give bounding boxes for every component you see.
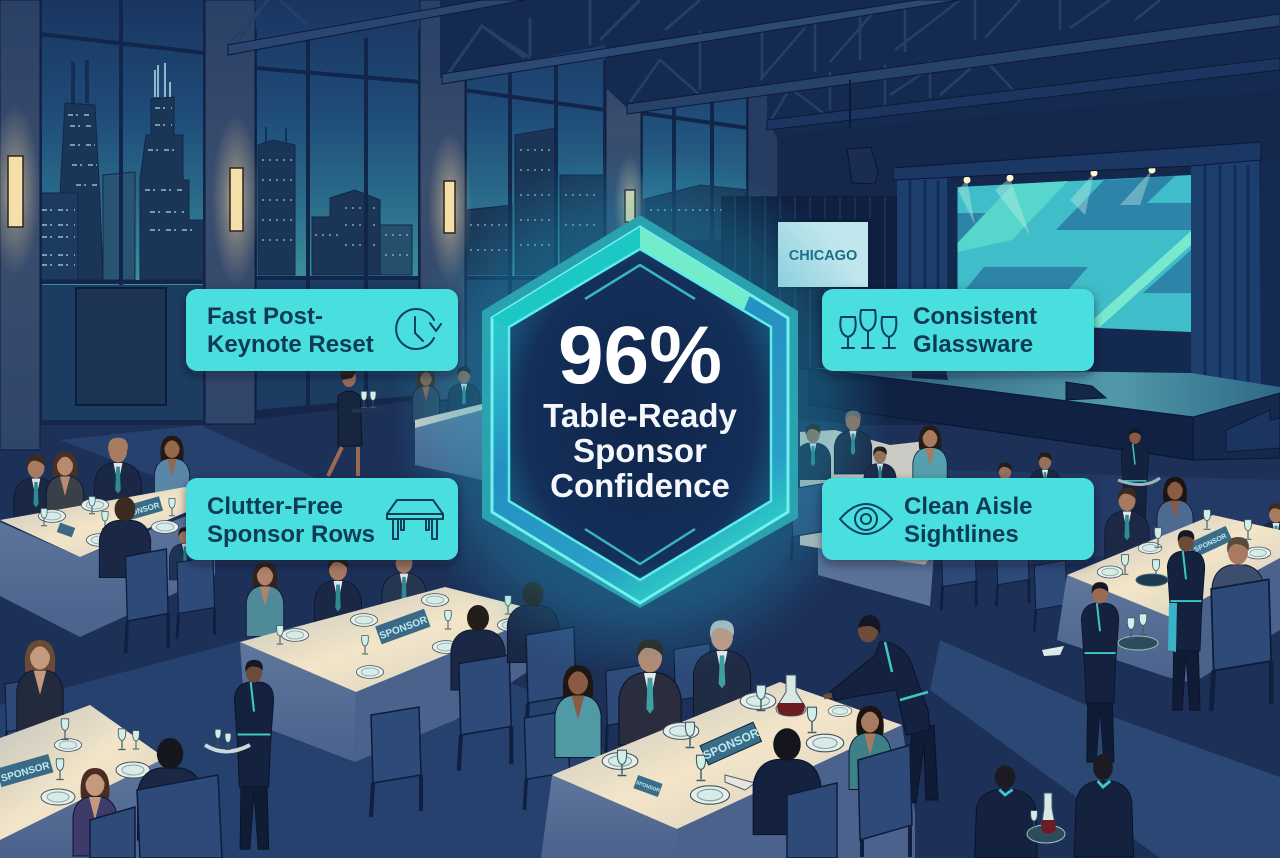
card: fast post-keynote reset: Fast Post- [207,303,323,330]
banquet table A: upper left [0,436,215,653]
banquet table E and back right guests [791,411,1160,632]
card: clutter-free sponsor rows: Sponsor Rows [207,521,375,548]
window mullions [40,0,748,420]
Chicago sign [775,219,871,289]
stat label: Sponsor [573,432,707,469]
card: clutter-free sponsor rows [186,478,458,560]
bottom right servers [975,754,1134,858]
hexagon bright ring [492,227,788,603]
banquet table B: center left: SPONSOR [378,614,430,642]
banquet table A: upper left: SPONSOR [120,501,161,520]
wall pillars and sconces [0,0,778,450]
ceiling trusses [228,0,1280,147]
hexagon glow [390,147,890,677]
card: consistent glassware: Glassware [913,331,1033,358]
lit tower windows [42,108,740,265]
banquet table: back small table with guests [412,366,482,480]
Chicago sign: CHICAGO [789,248,857,264]
card: clutter-free sponsor rows: Clutter-Free [207,493,343,520]
hexagon accent lines [585,265,695,564]
window wall with Chicago skyline [40,0,748,420]
hexagon top highlight [640,227,750,310]
hexagon outer band [482,215,798,608]
stage back wall [778,90,1280,440]
sponsor table tent: SPONSOR [701,725,762,763]
banquet table C: lower left with server [0,640,274,858]
central stat badge: hexagon [482,215,798,608]
card: consistent glassware [822,289,1094,371]
card: fast post-keynote reset [186,289,458,371]
stage curtains [893,142,1280,388]
roof beams [228,0,1280,147]
banquet table B: center left [240,550,576,817]
icon: clock with arrow [396,309,441,349]
red wine decanter [776,675,806,716]
lower window panes [40,278,606,420]
stat label [543,397,738,504]
speaker [847,147,878,184]
presentation screen [947,172,1191,373]
icon: eye [840,504,892,534]
card: fast post-keynote reset: Keynote Reset [207,331,374,358]
stage lights [958,166,1156,235]
stat label: Confidence [550,467,730,504]
card: consistent glassware: Consistent [913,303,1037,330]
stat value: 96% [558,310,722,401]
server leaning over table [824,615,938,803]
banquet table F: right [1042,477,1280,762]
banquet table D: front center [524,615,938,858]
exit doors [76,288,166,405]
server with tray walking [328,369,385,476]
icon: table [387,500,443,539]
small sponsor tent: SPONSOR [635,780,661,794]
card: clean aisle sightlines: Clean Aisle [904,493,1032,520]
stage area [722,90,1280,460]
card: clean aisle sightlines: Sightlines [904,521,1019,548]
hexagon core [509,249,771,580]
stage platform [809,368,1280,460]
stat label: Table-Ready [543,397,738,434]
banquet table C: lower left with server: SPONSOR [0,760,52,785]
icon: three wine glasses [840,310,896,348]
side drape panel [722,197,897,369]
card: clean aisle sightlines [822,478,1094,560]
banquet table F: right: SPONSOR [1193,533,1228,554]
small sponsor tent [633,775,663,797]
skyline towers [40,60,748,280]
